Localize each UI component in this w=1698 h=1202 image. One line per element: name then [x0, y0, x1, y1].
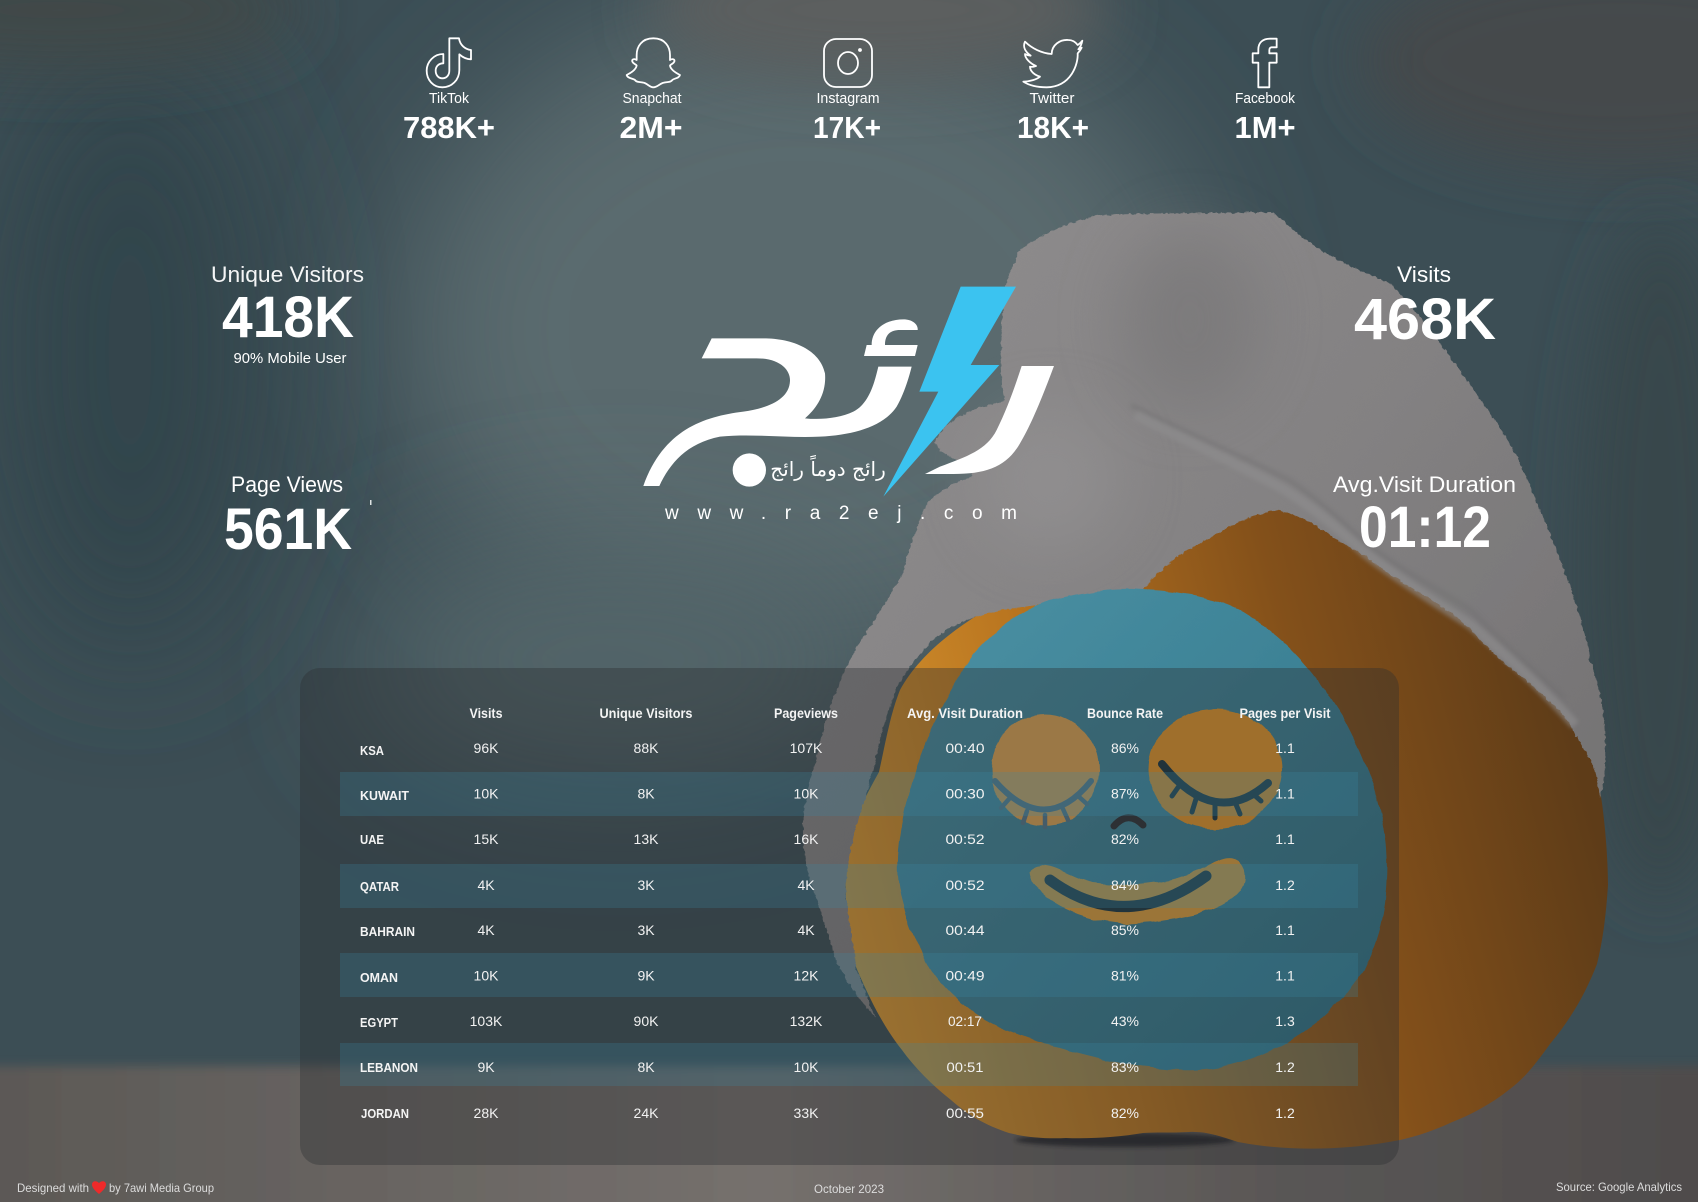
row: Kuwait: 87% [1111, 786, 1139, 802]
social: Instagram [813, 39, 881, 145]
row: KSA: 96K [474, 740, 499, 756]
icon: Twitter [1023, 40, 1082, 87]
row: Egypt: 43% [1111, 1013, 1139, 1029]
stat mark: small tick [370, 500, 372, 505]
footer: source: Source: Google Analytics [1556, 1180, 1682, 1194]
table header: Pages per Visit [1240, 706, 1331, 721]
right eyelashes [1162, 764, 1268, 818]
row: Bahrain: 4K [797, 922, 815, 938]
row: UAE: 1.1 [1275, 831, 1295, 847]
stat: average visit duration: Avg.Visit Duration [1333, 472, 1516, 497]
footer: credit: Designed with [17, 1181, 89, 1195]
social: Snapchat [620, 38, 682, 145]
row: Lebanon [360, 1059, 1295, 1075]
row: UAE [360, 831, 1295, 847]
icon: Snapchat [627, 38, 680, 87]
social: TikTok: TikTok [429, 90, 469, 107]
table stripes [340, 772, 1358, 1086]
row: Bahrain: 1.1 [1275, 922, 1295, 938]
table header: Avg. Visit Duration [907, 706, 1023, 721]
row: Kuwait: KUWAIT [360, 788, 409, 803]
social: Twitter: Twitter [1030, 90, 1074, 107]
row: Qatar: 3K [637, 877, 655, 893]
row: Qatar: 84% [1111, 877, 1139, 893]
row: Kuwait: 10K [794, 786, 819, 802]
smile [1050, 876, 1206, 907]
row: Lebanon: LEBANON [360, 1060, 418, 1075]
social: Facebook: 1M+ [1234, 110, 1296, 145]
stat: average visit duration [1333, 472, 1516, 560]
stat: visits: Visits [1397, 262, 1451, 287]
row: Lebanon: 9K [477, 1059, 495, 1075]
row: Oman: OMAN [360, 970, 398, 985]
row: UAE: 15K [474, 831, 499, 847]
row: Egypt: EGYPT [360, 1015, 398, 1030]
row: Kuwait: 00:30 [946, 786, 985, 802]
towel [803, 212, 1605, 1017]
icon: Instagram [824, 39, 872, 87]
row: KSA [360, 740, 1295, 758]
row: KSA: 86% [1111, 740, 1139, 756]
row: Lebanon: 00:51 [946, 1059, 984, 1075]
row: Bahrain: 4K [477, 922, 495, 938]
row: Qatar: 4K [797, 877, 815, 893]
social: Facebook [1234, 39, 1296, 145]
row: Oman: 81% [1111, 968, 1139, 984]
row: Qatar: 1.2 [1275, 877, 1295, 893]
stat: unique visitors: 90% Mobile User [234, 350, 346, 367]
logo lightning bolt [883, 287, 1016, 497]
stat: average visit duration: 01:12 [1359, 495, 1491, 560]
row: Jordan: 28K [474, 1105, 499, 1121]
row: Egypt: 132K [790, 1013, 823, 1029]
stat: unique visitors: 418K [222, 285, 354, 350]
row: Kuwait: 10K [474, 786, 499, 802]
row: Jordan: 00:55 [946, 1105, 984, 1121]
row: UAE: 13K [634, 831, 659, 847]
row: Egypt [360, 1013, 1295, 1030]
row: Egypt: 02:17 [948, 1013, 982, 1029]
row: Lebanon: 8K [637, 1059, 655, 1075]
clay mask [898, 589, 1387, 1070]
row: Qatar [360, 877, 1295, 894]
stat: unique visitors [211, 262, 364, 367]
footer: credit [17, 1181, 214, 1195]
row: Lebanon: 83% [1111, 1059, 1139, 1075]
row: Qatar: 00:52 [946, 877, 985, 893]
row: Oman: 10K [474, 968, 499, 984]
row: Egypt: 1.3 [1275, 1013, 1295, 1029]
logo tagline: رائج دوماً رائج [770, 455, 886, 481]
row: Kuwait: 8K [637, 786, 655, 802]
mouth patch [1029, 858, 1245, 924]
row: Oman: 00:49 [946, 968, 985, 984]
row: KSA: 00:40 [946, 740, 985, 756]
social: Facebook: Facebook [1235, 90, 1295, 107]
social: Instagram: 17K+ [813, 110, 881, 145]
stat: page views [224, 472, 352, 562]
row: Oman: 9K [637, 968, 655, 984]
social: Snapchat: Snapchat [622, 90, 682, 107]
table header: Visits [470, 706, 502, 721]
stat: page views: 561K [224, 497, 352, 562]
social: TikTok [403, 38, 495, 145]
left eye patch [991, 714, 1099, 826]
panel: country table [300, 668, 1399, 1165]
social: Twitter [1017, 40, 1089, 145]
pumpkin shadow [1015, 1133, 1235, 1147]
row: Kuwait [360, 786, 1295, 803]
table header [470, 706, 1331, 721]
social: Snapchat: 2M+ [620, 110, 682, 145]
row: Jordan: JORDAN [361, 1106, 409, 1121]
row: Egypt: 103K [470, 1013, 503, 1029]
towel shading [980, 230, 1575, 725]
row: Jordan: 33K [794, 1105, 819, 1121]
footer: date: October 2023 [814, 1182, 884, 1196]
row: Bahrain: 3K [637, 922, 655, 938]
row: Lebanon: 1.2 [1275, 1059, 1295, 1075]
logo web address: www.ra2ej.com [664, 503, 1017, 524]
logo: Ra2ej [643, 287, 1054, 524]
row: Jordan: 24K [634, 1105, 659, 1121]
icon: Facebook [1253, 39, 1277, 87]
row: KSA: 107K [790, 740, 823, 756]
floor [0, 1066, 1698, 1202]
row: KSA: 1.1 [1275, 740, 1295, 756]
table header: Unique Visitors [600, 706, 692, 721]
left eyelashes [995, 781, 1091, 827]
table header: Pageviews [774, 706, 838, 721]
row: Jordan: 82% [1111, 1105, 1139, 1121]
right eye patch [1148, 709, 1282, 829]
pumpkin body [846, 480, 1608, 1149]
social: Twitter: 18K+ [1017, 110, 1089, 145]
row: UAE: 16K [794, 831, 819, 847]
row: Qatar: 4K [477, 877, 495, 893]
row: Bahrain [360, 922, 1295, 939]
row: Qatar: QATAR [360, 879, 400, 894]
row: UAE: 82% [1111, 831, 1139, 847]
row: Jordan: 1.2 [1275, 1105, 1295, 1121]
row: Bahrain: 00:44 [946, 922, 985, 938]
logo lettering [643, 319, 1054, 487]
social: TikTok: 788K+ [403, 110, 495, 145]
row: UAE: 00:52 [946, 831, 985, 847]
row: Egypt: 90K [634, 1013, 659, 1029]
social: Instagram: Instagram [816, 90, 880, 107]
row: Oman: 1.1 [1275, 968, 1295, 984]
icon: heart [92, 1181, 106, 1194]
nose [1114, 818, 1143, 826]
footer: credit: by 7awi Media Group [109, 1181, 214, 1195]
row: Jordan [361, 1105, 1295, 1121]
row: Bahrain: 85% [1111, 922, 1139, 938]
row: Lebanon: 10K [794, 1059, 819, 1075]
row: Oman: 12K [794, 968, 819, 984]
table header: Bounce Rate [1087, 706, 1163, 721]
icon: TikTok [427, 38, 471, 87]
row: UAE: UAE [360, 832, 384, 847]
row: Oman [360, 968, 1295, 985]
stat: page views: Page Views [231, 472, 343, 497]
table background [300, 668, 1399, 1165]
stat: unique visitors: Unique Visitors [211, 262, 364, 287]
row: KSA: KSA [360, 743, 385, 758]
stat: visits: 468K [1354, 287, 1496, 352]
row: KSA: 88K [634, 740, 659, 756]
row: Kuwait: 1.1 [1275, 786, 1295, 802]
row: Bahrain: BAHRAIN [360, 924, 415, 939]
